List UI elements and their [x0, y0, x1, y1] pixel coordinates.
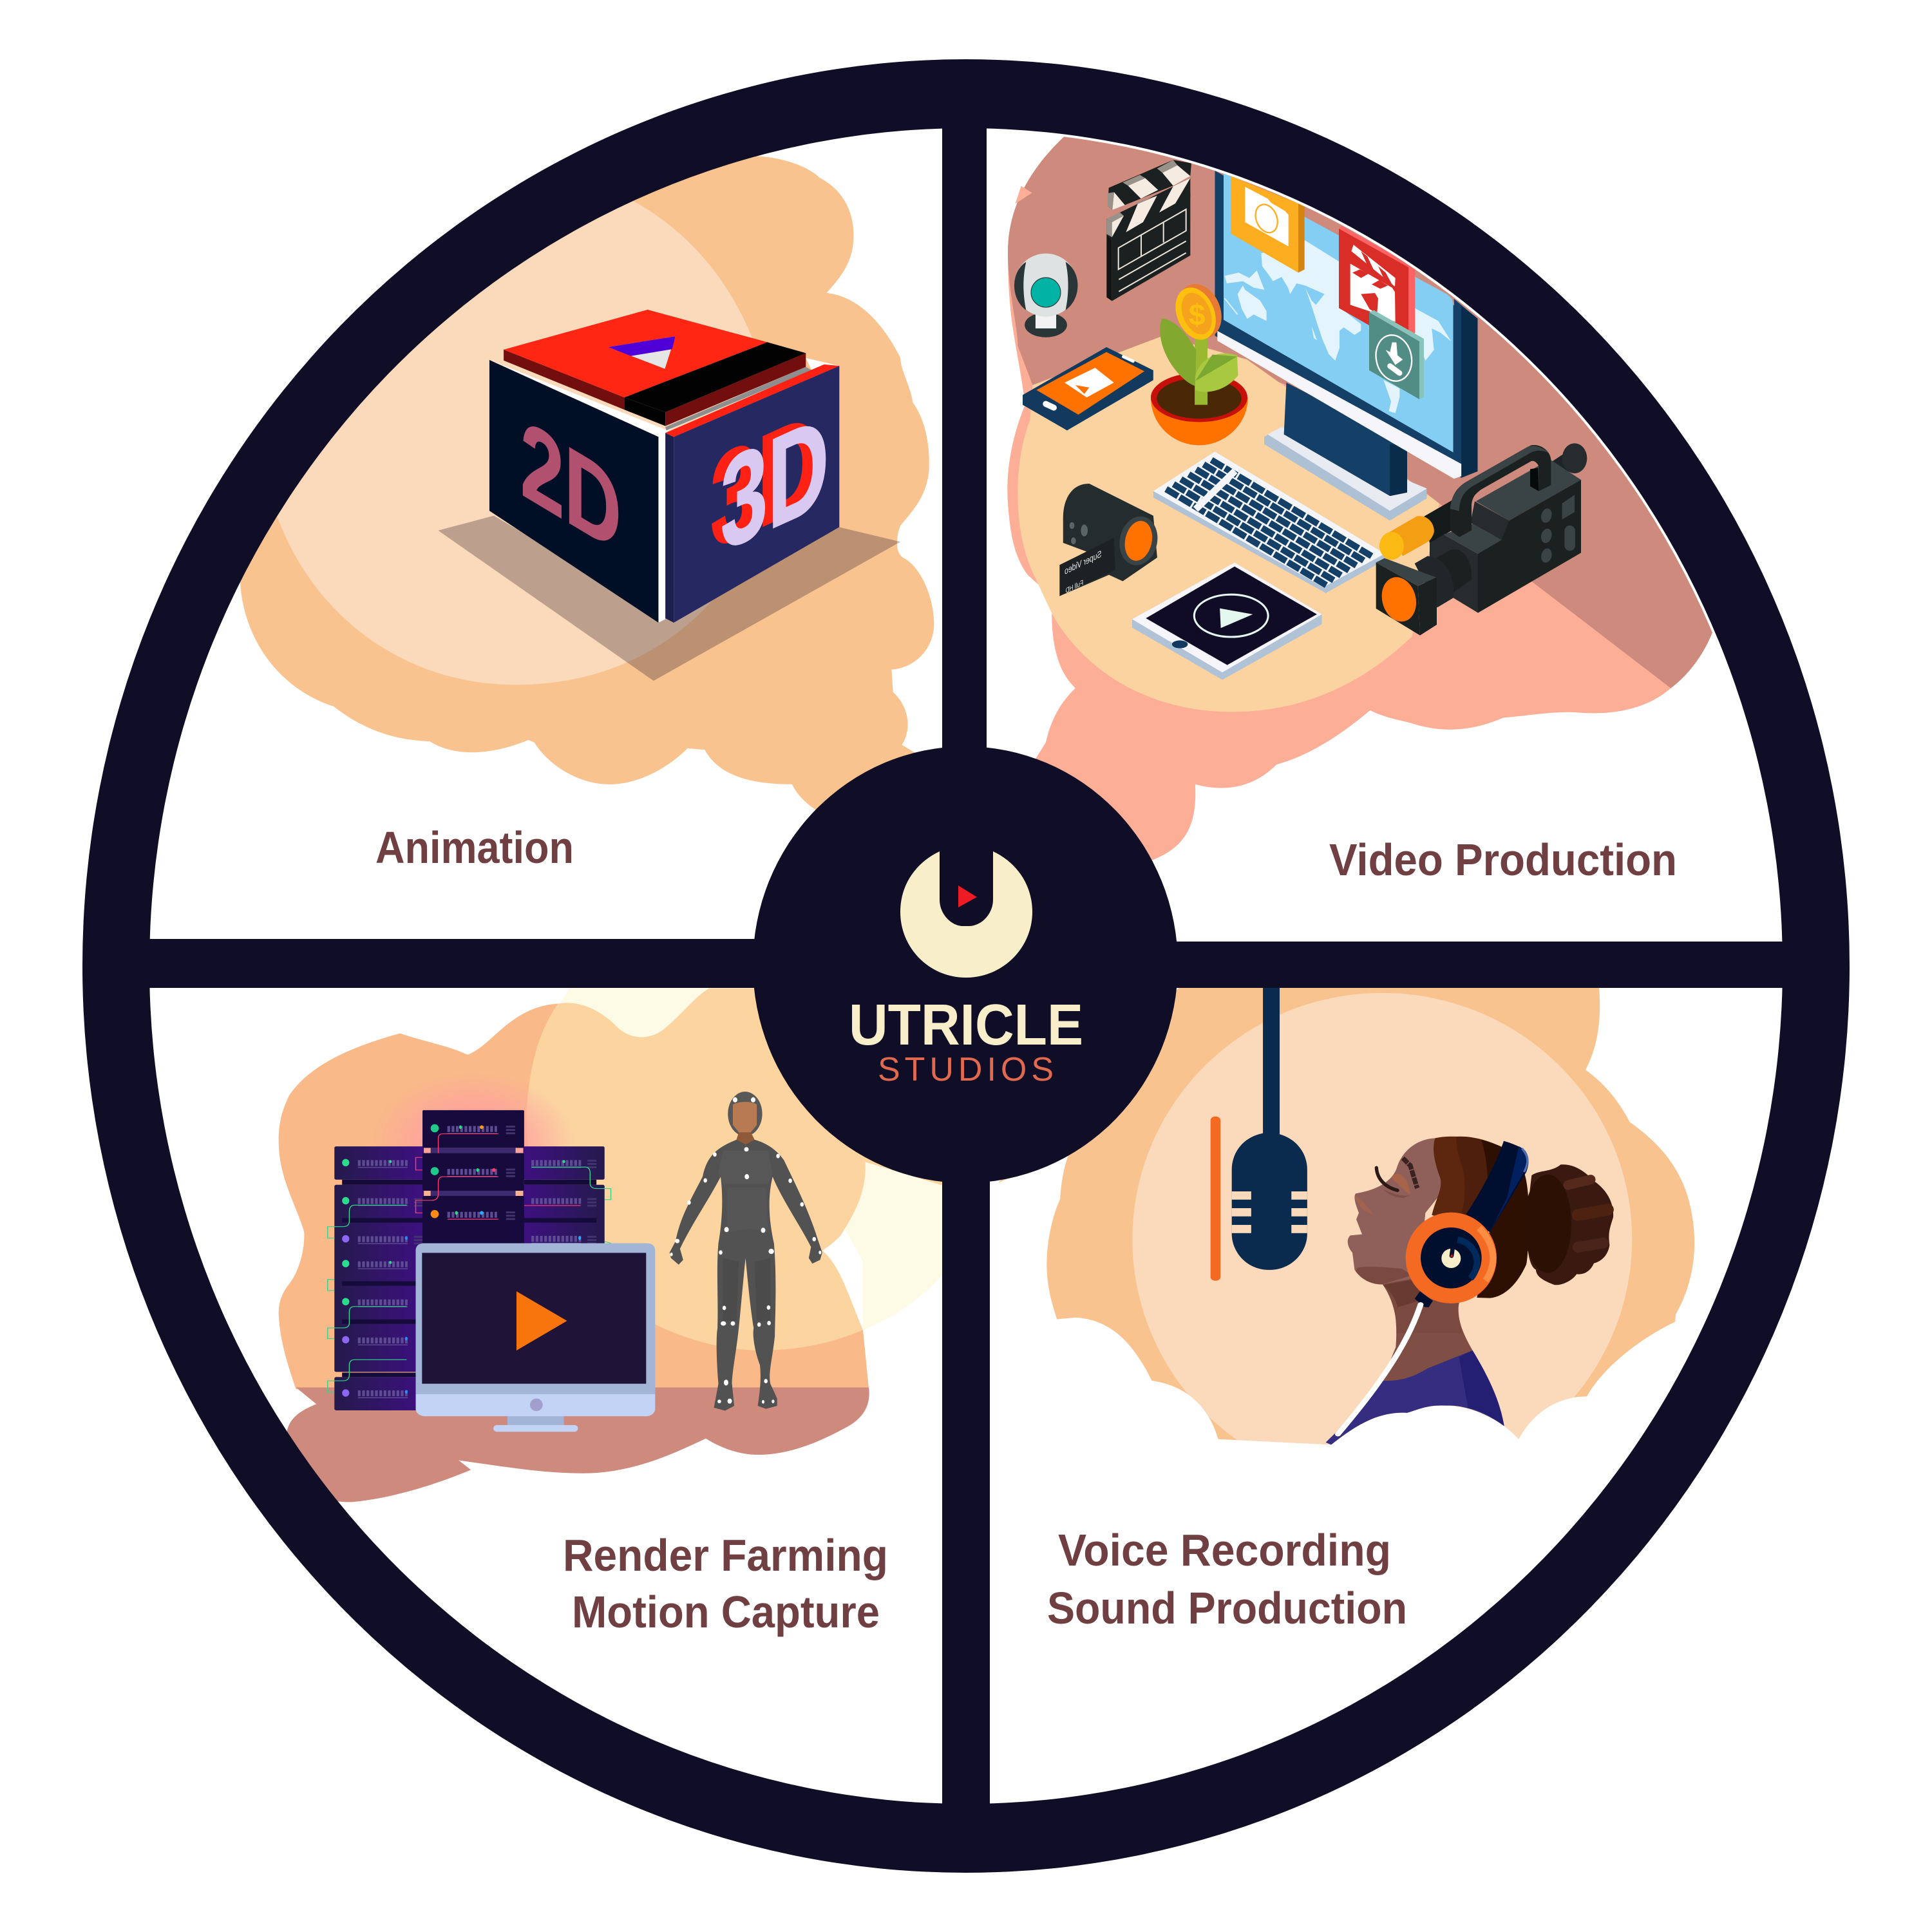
- server racks: [328, 1110, 611, 1410]
- screen and world map: [1224, 161, 1454, 462]
- server glow: [372, 1073, 574, 1214]
- monitor frame and stand: [1215, 171, 1477, 520]
- salmon notch on wall: [1016, 186, 1032, 204]
- woman shirt and neck: [1326, 1262, 1504, 1444]
- cube shadow: [438, 516, 900, 681]
- label: voice recording: Voice Recording: [1058, 1525, 1391, 1575]
- icon: plant with coin: $: [1189, 298, 1205, 332]
- floor: [287, 1387, 869, 1502]
- brand name: UTRICLE: [849, 993, 1083, 1057]
- panel: animation illustration: [240, 156, 934, 810]
- 2D 3D cube: 3D: [721, 387, 829, 579]
- 2D 3D cube: [489, 310, 839, 623]
- 2D 3D cube: 3D: [711, 384, 819, 576]
- panel: video production desk objects: [1014, 254, 1385, 680]
- orange level bar: [1211, 1117, 1220, 1281]
- label: render farming: Render Farming: [563, 1530, 888, 1580]
- woman head with headphones: [1348, 1137, 1613, 1333]
- panel: video production illustration: [1007, 129, 1735, 860]
- label: motion capture: Motion Capture: [572, 1587, 880, 1637]
- light ellipse: [1132, 993, 1632, 1486]
- label: video production: Video Production: [1329, 835, 1677, 885]
- icon: orange camera card: [1231, 176, 1305, 272]
- desk: [1018, 336, 1439, 712]
- icon: keyboard: [1153, 451, 1385, 593]
- headphone cord: [1338, 1305, 1421, 1434]
- icon: small camcorder: Full HD: [1066, 579, 1083, 596]
- icon: microphone: [1232, 986, 1307, 1270]
- desktop monitor with play icon: [416, 1243, 655, 1432]
- brand subtitle: STUDIOS: [878, 1051, 1054, 1088]
- logo: crescent with play triangle: [900, 851, 1032, 978]
- label: sound production: Sound Production: [1047, 1583, 1407, 1633]
- 2D 3D cube: 2D: [520, 395, 621, 578]
- animation light circle: [277, 201, 769, 685]
- salmon blob: [1007, 129, 1712, 860]
- peach blob: [998, 988, 1694, 1444]
- icon: video camera: [1376, 443, 1587, 636]
- wall: [1008, 129, 1735, 688]
- label: animation: Animation: [375, 822, 574, 873]
- panel: voice recording illustration: [998, 986, 1694, 1486]
- icon: red clapper card: [1339, 226, 1415, 348]
- icon: small camcorder: [1059, 484, 1162, 596]
- wheel cross bars: [142, 122, 1790, 1810]
- centre hub: [753, 746, 1178, 1183]
- motion capture figure: [670, 1092, 822, 1411]
- icon: webcam: [1014, 254, 1078, 337]
- icon: smartphone: [1023, 347, 1153, 430]
- animation peach blob: [240, 156, 934, 810]
- panel: render farming and motion capture illustration: [279, 988, 944, 1502]
- icon: small camcorder: Super Video: [1065, 548, 1101, 576]
- lower screen bezel band: [1303, 366, 1461, 464]
- icon: tablet: [1132, 562, 1322, 680]
- light orange circle: [526, 988, 944, 1350]
- icon: clapperboard: [1106, 160, 1191, 301]
- monitor screen with map and app cards: [1220, 161, 1461, 464]
- orange blob: [279, 1004, 869, 1389]
- icon: plant with coin: [1151, 278, 1248, 445]
- pale yellow shape: [560, 988, 944, 1330]
- icon: green download card: [1369, 310, 1424, 399]
